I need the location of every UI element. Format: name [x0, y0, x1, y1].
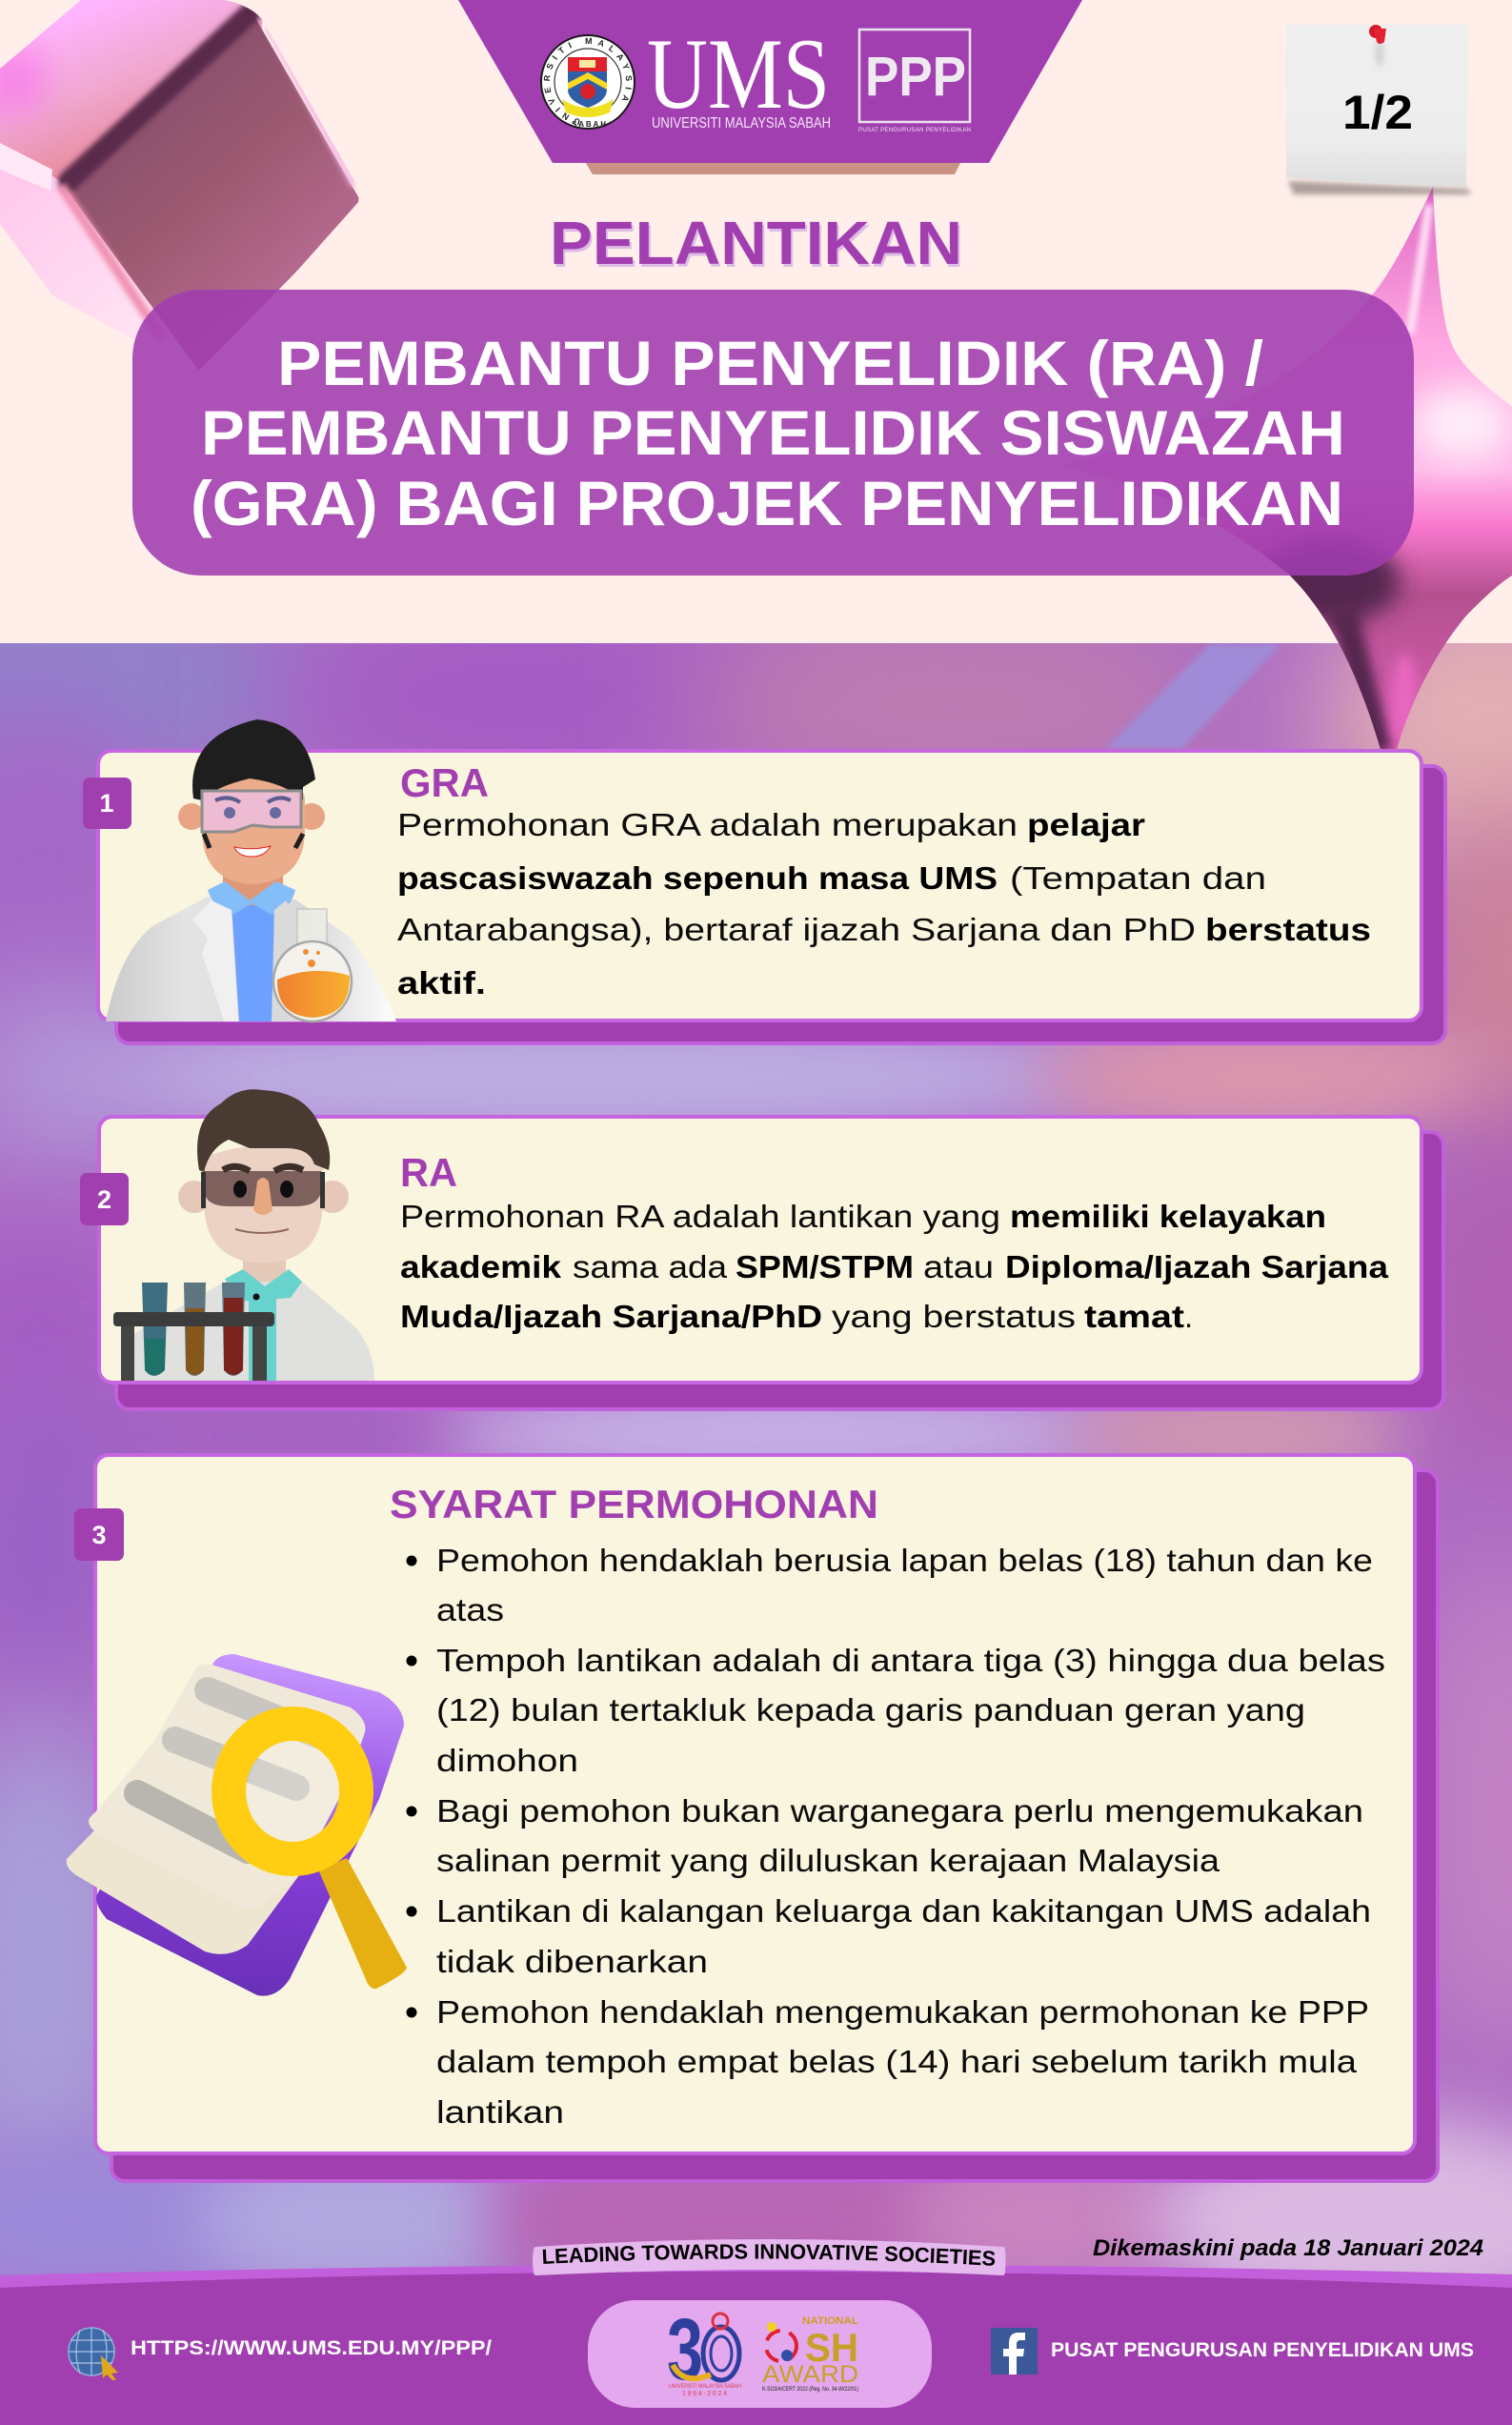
- list text: Bagi pemohon bukan warganegara perlu mengemukakan: [436, 1793, 1363, 1829]
- heading: RA: RA: [400, 1150, 457, 1195]
- logo: National OSH Award: [762, 2315, 858, 2393]
- body text RA: atau: [923, 1249, 994, 1284]
- facebook text: PUSAT PENGURUSAN PENYELIDIKAN UMS: [1051, 2339, 1474, 2361]
- badge 1: [83, 778, 131, 829]
- test tube rack: [113, 1283, 274, 1381]
- list text: Pemohon hendaklah berusia lapan belas (18) tahun dan ke: [436, 1543, 1373, 1578]
- sunglasses: [204, 1171, 321, 1206]
- panel 3: Syarat Permohonan: [67, 1455, 1438, 2181]
- logo: UMS wordmark: UMS: [647, 18, 830, 130]
- list text: dalam tempoh empat belas (14) hari sebelum tarikh mula: [436, 2044, 1358, 2079]
- website link: [69, 2328, 492, 2380]
- logo: PPP box: PPP: [865, 46, 966, 108]
- background: textured purple gradient: [0, 643, 1512, 2275]
- ribbon shadow tab: [586, 163, 960, 174]
- list text: [436, 1543, 1385, 2130]
- bullets: [406, 1555, 417, 2018]
- goggles: [202, 791, 301, 832]
- card shadow: [116, 766, 1445, 1043]
- pinned note: page number: [1285, 25, 1471, 194]
- website text: HTTPS://WWW.UMS.EDU.MY/PPP/: [131, 2337, 492, 2359]
- body text GRA: pascasiswazah sepenuh masa UMS: [397, 860, 998, 896]
- heading: PELANTIKAN: PELANTIKAN: [550, 209, 962, 277]
- list text: dimohon: [436, 1743, 578, 1778]
- logo: UMS emblem: SABAH: [572, 120, 606, 129]
- logo: National OSH Award: SH: [805, 2325, 858, 2370]
- body text RA: memiliki kelayakan: [1010, 1199, 1326, 1234]
- card: [95, 1455, 1415, 2153]
- card: [98, 751, 1421, 1021]
- decorative 3D cube: [0, 0, 360, 376]
- body text GRA: Permohonan GRA adalah merupakan: [397, 807, 1018, 842]
- title text: PEMBANTU PENYELIDIK (RA) /: [277, 328, 1263, 398]
- badge 2: [80, 1173, 129, 1225]
- body text RA: Diploma/Ijazah Sarjana: [1005, 1249, 1389, 1284]
- title text: (GRA) BAGI PROJEK PENYELIDIKAN: [191, 468, 1343, 538]
- facebook link: [991, 2328, 1474, 2374]
- logo: UMS 30th anniversary: 3: [667, 2301, 703, 2398]
- body text RA: akademik: [400, 1249, 562, 1284]
- card shadow: [116, 1132, 1443, 1409]
- body text RA: Muda/Ijazah Sarjana/PhD: [400, 1299, 822, 1334]
- logo: university name: UNIVERSITI MALAYSIA SABAH: [652, 115, 831, 131]
- body text RA: .: [1184, 1299, 1193, 1334]
- footer lip: [0, 2265, 1512, 2290]
- badge 2: 2: [97, 1185, 111, 1214]
- footer fill: [0, 2272, 1512, 2425]
- body text GRA: (Tempatan dan: [1010, 860, 1266, 896]
- card: [99, 1117, 1421, 1383]
- body text GRA: pelajar: [1027, 807, 1145, 842]
- logo: National OSH Award: AWARD: [762, 2361, 858, 2388]
- body text RA: [400, 1199, 1389, 1334]
- list text: salinan permit yang diluluskan kerajaan Malaysia: [436, 1843, 1220, 1878]
- icon: globe with cursor: [69, 2328, 118, 2380]
- card shadow: [111, 1470, 1438, 2181]
- footer band: [0, 2265, 1512, 2425]
- magnifier: [229, 1724, 407, 1989]
- body text RA: tamat: [1084, 1299, 1184, 1334]
- list text: Tempoh lantikan adalah di antara tiga (3) hingga dua belas: [436, 1643, 1385, 1678]
- list text: lantikan: [436, 2094, 564, 2130]
- badge 3: 3: [91, 1521, 107, 1549]
- list text: Lantikan di kalangan keluarga dan kakitangan UMS adalah: [436, 1893, 1371, 1929]
- body text RA: Permohonan RA adalah lantikan yang: [400, 1199, 1000, 1234]
- illustration: document with magnifier: [67, 1654, 407, 1996]
- page number text: 1/2: [1342, 86, 1413, 139]
- header ribbon with logos: [458, 0, 1082, 174]
- body text RA: yang berstatus: [832, 1299, 1076, 1334]
- heading: Syarat Permohonan: SYARAT PERMOHONAN: [390, 1482, 878, 1526]
- ribbon: [458, 0, 1082, 163]
- heading: GRA: GRA: [400, 760, 489, 805]
- flask: [273, 909, 352, 1021]
- illustration: scientist with test tubes: [113, 1089, 374, 1381]
- list text: Pemohon hendaklah mengemukakan permohonan ke PPP: [436, 1994, 1369, 2030]
- tagline pill: LEADING TOWARDS INNOVATIVE SOCIETIES: [543, 2244, 995, 2266]
- logo: National OSH Award: K-SO3/4/CERT 2022 (Reg. No. 34-W/22/01): [762, 2387, 858, 2393]
- logo: UMS 30th anniversary: [667, 2301, 741, 2398]
- bullet list: [406, 1543, 1385, 2130]
- title panel: [132, 290, 1414, 576]
- logo: National OSH Award: NATIONAL: [802, 2315, 858, 2327]
- pin: [1369, 25, 1386, 67]
- list text: atas: [436, 1592, 504, 1627]
- illustration: scientist with flask: [106, 719, 396, 1021]
- badge 1: 1: [99, 789, 114, 818]
- badge 3: [74, 1508, 124, 1561]
- panel 1: GRA: [83, 719, 1445, 1043]
- logo: UMS emblem: UNIVERSITI MALAYSIA: [543, 38, 633, 126]
- body text GRA: aktif.: [397, 965, 486, 1000]
- body text RA: sama ada: [573, 1249, 728, 1284]
- list text: (12) bulan tertakluk kepada garis panduan geran yang: [436, 1692, 1305, 1728]
- logo pill: [588, 2300, 932, 2408]
- logo: PPP box: [858, 30, 971, 133]
- title text: PEMBANTU PENYELIDIK SISWAZAH: [201, 397, 1345, 468]
- list text: tidak dibenarkan: [436, 1944, 708, 1979]
- logo: UMS 30th anniversary: UNIVERSITI MALAYSIA SABAH: [669, 2384, 741, 2390]
- logo: PPP box: PUSAT PENGURUSAN PENYELIDIKAN: [858, 128, 971, 133]
- body text GRA: [397, 807, 1371, 1000]
- logo: UMS 30th anniversary: 1994-2024: [682, 2391, 727, 2397]
- body text GRA: berstatus: [1205, 912, 1371, 947]
- body text RA: SPM/STPM: [736, 1249, 914, 1284]
- title text: [191, 328, 1345, 538]
- decorative 3D star: [1134, 187, 1512, 749]
- panel 2: RA: [80, 1089, 1443, 1409]
- body text GRA: Antarabangsa), bertaraf ijazah Sarjana dan PhD: [397, 912, 1196, 947]
- update date: Dikemaskini pada 18 Januari 2024: [1093, 2235, 1483, 2261]
- icon: facebook: [991, 2328, 1038, 2374]
